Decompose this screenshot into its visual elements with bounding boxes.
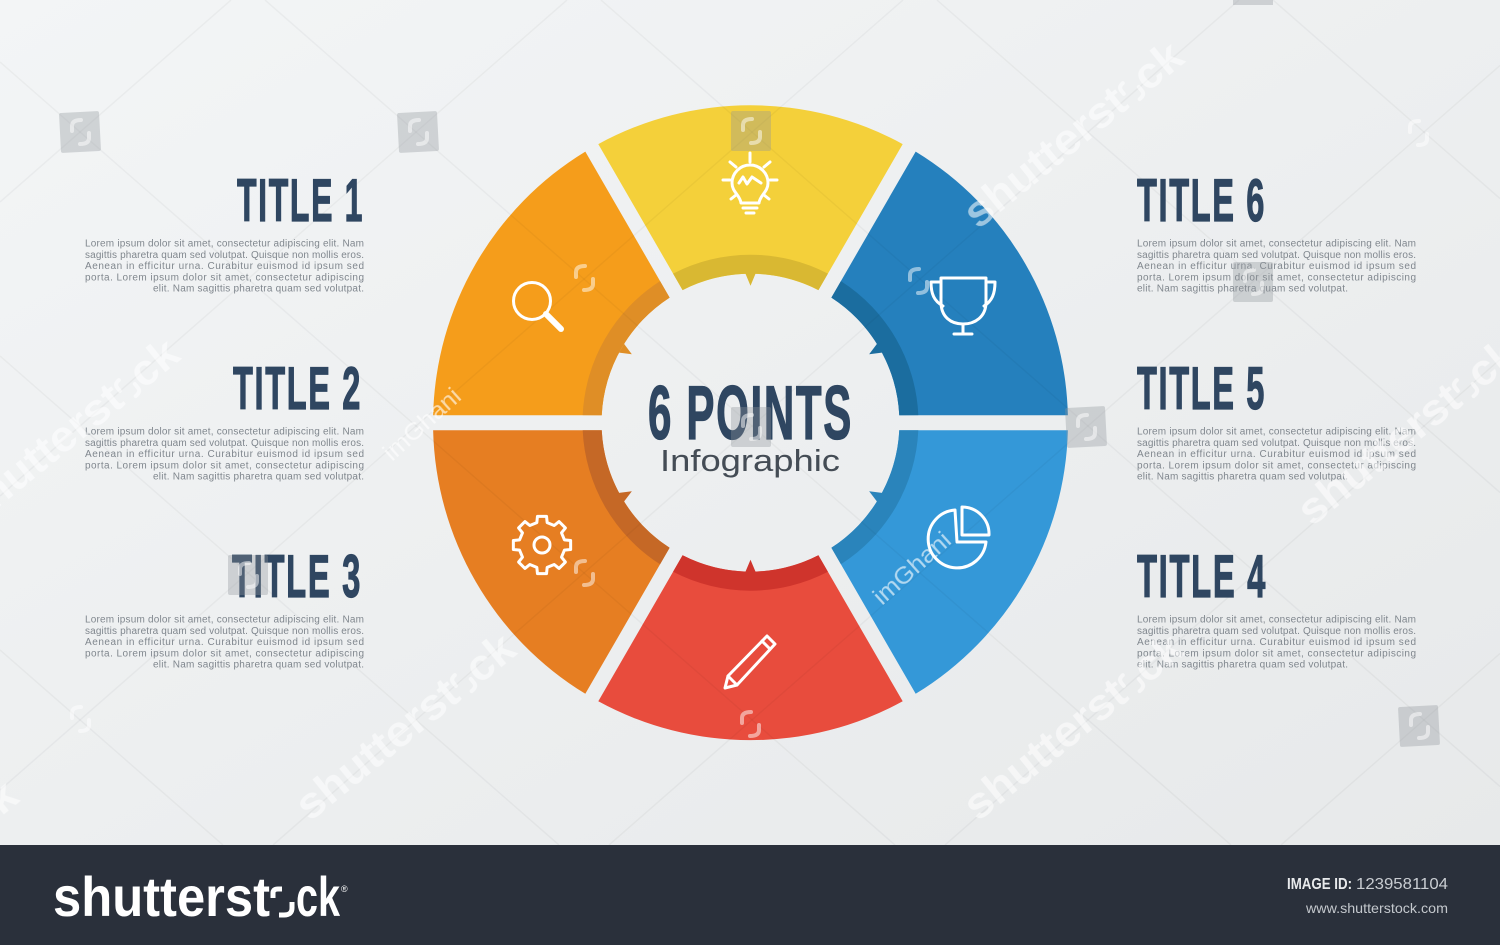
footer image id — [1287, 876, 1448, 893]
watermarks: ck — [1123, 623, 1193, 693]
block: title 3: elit. Nam sagittis pharetra quam sed volutpat. — [153, 660, 364, 670]
footer logo: ® — [341, 884, 348, 894]
segment: dark blue — [789, 132, 1102, 488]
block: title 4: sagittis pharetra quam sed volutpat. Quisque non mollis eros. — [1137, 626, 1416, 637]
footer logo: ck — [296, 865, 341, 928]
block: title 1: TITLE 1 — [237, 167, 364, 234]
block: title 4: Aenean in efficitur urna. Curabitur euismod id ipsum sed — [1137, 637, 1416, 648]
block: title 2: porta. Lorem ipsum dolor sit amet, consectetur adipiscing — [85, 460, 364, 471]
block: title 3: Lorem ipsum dolor sit amet, consectetur adipiscing elit. Nam — [85, 614, 364, 626]
watermarks: imGhani — [868, 527, 957, 610]
block: title 3 — [85, 543, 364, 670]
segment: red — [598, 555, 903, 740]
block: title 6: Aenean in efficitur urna. Curabitur euismod id ipsum sed — [1137, 261, 1416, 272]
block: title 6 — [1137, 167, 1416, 294]
center title: 6 POINTS — [648, 371, 853, 456]
block: title 1: porta. Lorem ipsum dolor sit amet, consectetur adipiscing — [85, 272, 364, 283]
block: title 1: sagittis pharetra quam sed volutpat. Quisque non mollis eros. — [85, 250, 364, 261]
watermarks: ck — [455, 623, 525, 693]
icon: light bulb — [723, 153, 777, 213]
footer url: www.shutterstock.com — [1305, 900, 1448, 916]
segment: orange — [399, 132, 712, 488]
watermarks: ck — [1123, 31, 1193, 101]
block: title 4: porta. Lorem ipsum dolor sit amet, consectetur adipiscing — [1137, 648, 1416, 659]
icon: magnifier — [514, 282, 561, 329]
block: title 3: Aenean in efficitur urna. Curabitur euismod id ipsum sed — [85, 637, 364, 648]
block: title 3: porta. Lorem ipsum dolor sit amet, consectetur adipiscing — [85, 648, 364, 659]
block: title 6: Lorem ipsum dolor sit amet, consectetur adipiscing elit. Nam — [1137, 238, 1416, 250]
block: title 6: elit. Nam sagittis pharetra quam sed volutpat. — [1137, 284, 1348, 294]
watermarks: ck — [119, 328, 189, 398]
block: title 6: porta. Lorem ipsum dolor sit amet, consectetur adipiscing — [1137, 272, 1416, 283]
block: title 6: TITLE 6 — [1137, 167, 1266, 234]
donut chart: six segments — [399, 105, 1102, 740]
watermarks: shutterst — [953, 76, 1137, 238]
icon: pencil — [725, 636, 775, 688]
footer image id: 1239581104 — [1356, 876, 1448, 893]
block: title 5: elit. Nam sagittis pharetra quam sed volutpat. — [1137, 472, 1348, 482]
watermark brackets — [72, 119, 1428, 738]
block: title 2: Aenean in efficitur urna. Curabitur euismod id ipsum sed — [85, 449, 364, 460]
watermarks: imGhani — [378, 383, 467, 466]
block: title 5: porta. Lorem ipsum dolor sit amet, consectetur adipiscing — [1137, 460, 1416, 471]
block: title 5: Lorem ipsum dolor sit amet, consectetur adipiscing elit. Nam — [1137, 426, 1416, 438]
segment: dark orange — [399, 357, 712, 713]
block: title 1: elit. Nam sagittis pharetra quam sed volutpat. — [153, 284, 364, 294]
center heading — [648, 371, 853, 478]
block: title 5: sagittis pharetra quam sed volutpat. Quisque non mollis eros. — [1137, 438, 1416, 449]
block: title 1 — [85, 167, 364, 294]
block: title 3: TITLE 3 — [232, 543, 362, 610]
center subtitle: Infographic — [660, 443, 840, 478]
footer bar — [0, 845, 1500, 945]
block: title 2: sagittis pharetra quam sed volutpat. Quisque non mollis eros. — [85, 438, 364, 449]
watermarks: shutterst — [1287, 373, 1471, 535]
block: title 5: Aenean in efficitur urna. Curabitur euismod id ipsum sed — [1137, 449, 1416, 460]
footer image id: IMAGE ID: — [1287, 876, 1352, 893]
block: title 4 — [1137, 543, 1416, 670]
watermarks: shutterst — [285, 668, 469, 830]
block: title 4: elit. Nam sagittis pharetra quam sed volutpat. — [1137, 660, 1348, 670]
block: title 4: TITLE 4 — [1137, 543, 1267, 610]
block: title 5 — [1137, 355, 1416, 482]
block: title 2: TITLE 2 — [233, 355, 362, 422]
watermark squares — [59, 0, 1440, 747]
watermarks: shutterst — [953, 668, 1137, 830]
icon: trophy — [931, 278, 995, 334]
segment: yellow — [598, 105, 903, 290]
block: title 1: Aenean in efficitur urna. Curabitur euismod id ipsum sed — [85, 261, 364, 272]
block: title 4: Lorem ipsum dolor sit amet, consectetur adipiscing elit. Nam — [1137, 614, 1416, 626]
footer logo: shutterst — [53, 865, 270, 928]
block: title 5: TITLE 5 — [1137, 355, 1266, 422]
segment: light blue — [789, 357, 1102, 713]
block: title 6: sagittis pharetra quam sed volutpat. Quisque non mollis eros. — [1137, 250, 1416, 261]
block: title 2: elit. Nam sagittis pharetra quam sed volutpat. — [153, 472, 364, 482]
block: title 1: Lorem ipsum dolor sit amet, consectetur adipiscing elit. Nam — [85, 238, 364, 250]
block: title 3: sagittis pharetra quam sed volutpat. Quisque non mollis eros. — [85, 626, 364, 637]
icon: pie chart — [928, 507, 989, 568]
block: title 2 — [85, 355, 364, 482]
block: title 2: Lorem ipsum dolor sit amet, consectetur adipiscing elit. Nam — [85, 426, 364, 438]
icon: gear — [513, 516, 571, 574]
